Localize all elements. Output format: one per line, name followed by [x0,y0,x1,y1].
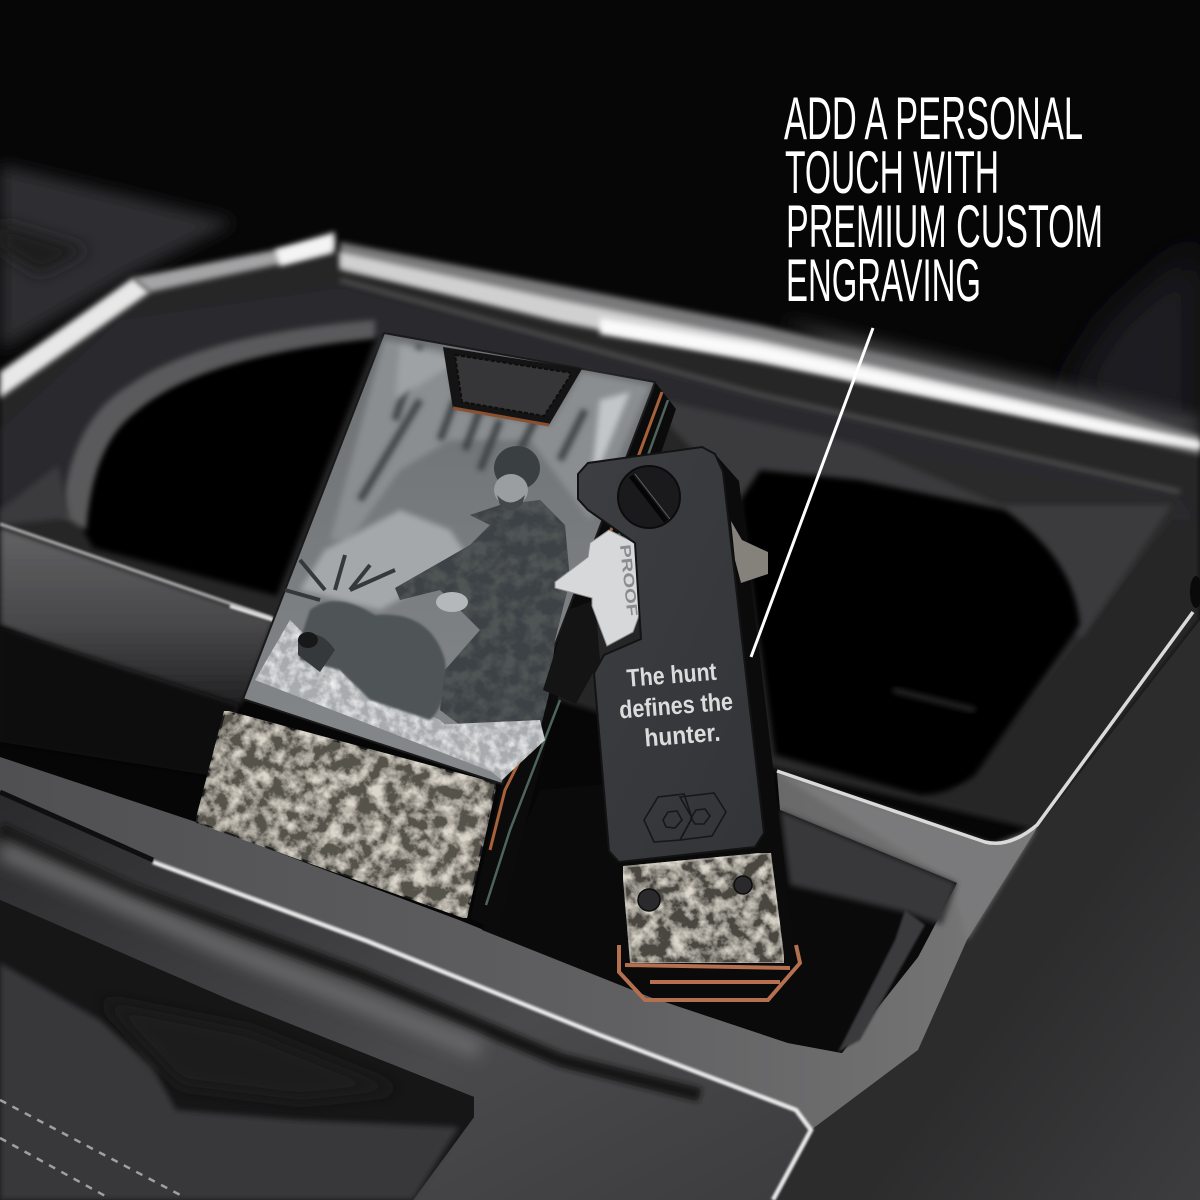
headline: ENGRAVING [786,247,981,314]
plate lower snow [430,720,545,780]
hunter [395,446,570,740]
hex logo [644,793,726,842]
copper ring [619,945,800,1000]
left cup opening [83,336,377,596]
tool silver key [555,530,641,646]
leather pull tab [443,347,582,425]
centre console trim [0,250,1200,830]
engraved quote [616,657,736,754]
tool black side [715,454,795,965]
metal clip [731,521,768,583]
callout line [751,328,873,657]
leather shifter boot [0,900,474,1200]
headline: TOUCH WITH [785,139,999,206]
engraved quote: hunter. [643,719,721,753]
engraved photo plate [243,333,655,784]
elastic strap [543,600,600,704]
dark pocket behind the tool [482,770,957,1053]
gloss lower band [0,792,811,1200]
tool aluminium body [578,447,764,862]
camo leather lower band [196,711,496,918]
key brand mark: PROOF [616,544,640,617]
wallet side stack [470,382,676,931]
cup holder recess [0,320,1180,795]
multitool [555,447,800,1000]
headline [784,85,1103,314]
matte ledge of console [0,757,1037,1130]
strap screws [638,876,752,911]
deer [285,555,446,720]
right lower slab [770,620,1200,1200]
slotted screw [618,466,680,528]
engraved quote: defines the [618,688,734,724]
chrome line around frame [777,612,1193,843]
forest backdrop [330,340,650,540]
card wallet [196,333,676,931]
camo strap on tool [623,853,784,963]
chrome trim highlights [0,232,1200,492]
black button [1190,576,1200,608]
engraved quote: The hunt [626,658,718,693]
left rail inside recess [0,524,274,775]
